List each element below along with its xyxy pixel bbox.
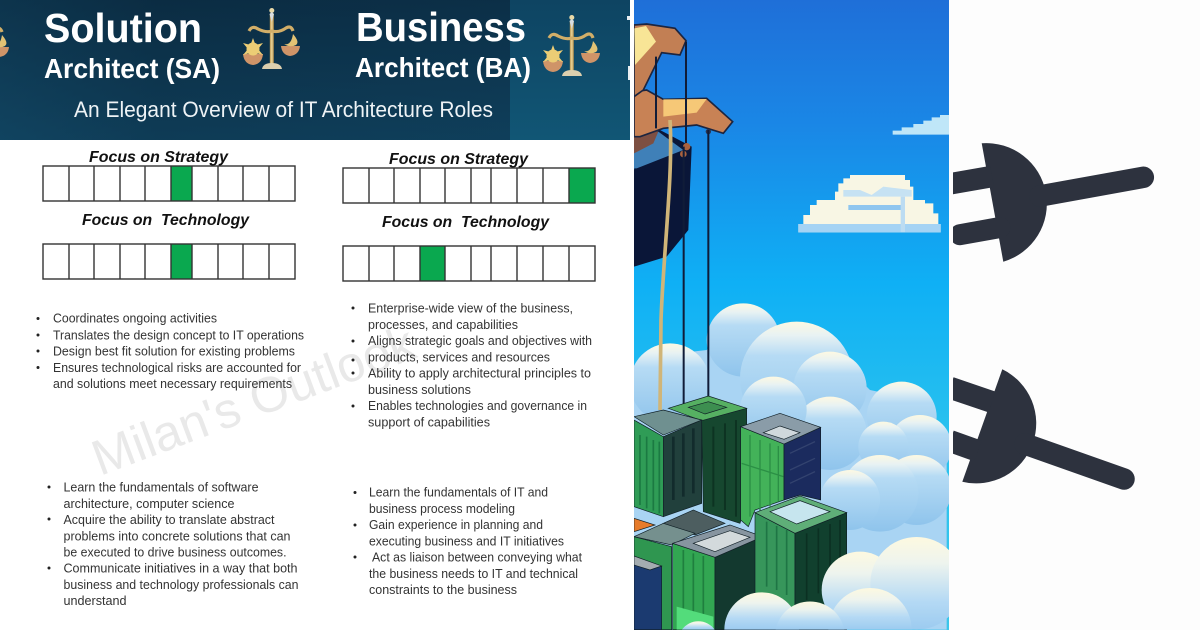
text block: solution architect how to become: understand [64,594,126,608]
icon: lower plug [950,369,1124,483]
text block: solution architect responsibilities: Coordinates ongoing activities [53,312,217,326]
text block: business architect how to become: the business needs to IT and technical [369,567,578,581]
cropped title letters at right edge [627,16,630,80]
meter: strategy [343,168,595,203]
watermark: Milan's Outlook [84,314,423,486]
text block: business architect how to become: executing business and IT initiatives [369,534,564,548]
label: focus on technology: Focus on Technology [382,214,550,231]
text block: business architect responsibilities: products, services and resources [368,350,550,364]
orange accent [634,518,655,532]
text block: business architect responsibilities: support of capabilities [368,416,490,430]
text block: business architect how to become: business process modeling [369,502,515,516]
text block: business architect responsibilities: Aligns strategic goals and objectives with [368,334,592,348]
subtitle: An Elegant Overview of IT Architecture Roles [74,97,493,122]
text block: business architect how to become: Gain experience in planning and [369,518,543,532]
panel: plug icons [949,0,1200,630]
solution architect focus meters [43,149,295,279]
title: Solution Architect [44,12,219,84]
tower: front right [755,496,847,630]
text block: solution architect responsibilities [36,312,304,391]
text block: business architect how to become: Learn the fundamentals of IT and [369,486,548,500]
tower: navy bottom left [634,556,662,630]
text block: solution architect how to become: problems into concrete solutions that can [64,530,290,544]
text block: solution architect how to become: be executed to drive business outcomes. [64,546,286,560]
title: Solution Architect: Architect (SA) [44,53,220,84]
title: Business Architect [356,12,530,83]
text block: solution architect responsibilities: Design best fit solution for existing problems [53,344,295,358]
text block: business architect how to become: constraints to the business [369,583,517,597]
text block: business architect responsibilities: Enables technologies and governance in [368,399,587,413]
text block: business architect how to become: Act as liaison between conveying what [372,550,582,564]
business architect focus meters [343,151,595,281]
illustration: balloon crane with ropes [634,24,733,267]
illustration: small and pixel clouds [798,115,950,232]
title: Business Architect: Business [356,4,526,50]
text block: business architect responsibilities: Enterprise-wide view of the business, [368,302,573,316]
panel: sky illustration [630,0,963,630]
text block: solution architect how to become [48,480,298,608]
text block: business architect responsibilities [352,302,592,430]
title: Solution Architect: Solution [44,5,202,51]
label: focus on strategy: Focus on Strategy [389,151,529,168]
text block: solution architect how to become: Learn the fundamentals of software [64,480,258,494]
icon: scales of solution architect [243,8,300,69]
illustration: cloud bank [630,303,952,630]
label: focus on technology: Focus on Technology [82,212,250,229]
text block: solution architect responsibilities: Translates the design concept to IT operations [53,328,304,342]
tower: left tall [634,410,702,517]
tower: front left [634,523,695,630]
meter: technology [43,244,295,279]
label: focus on strategy: Focus on Strategy [89,149,229,166]
tower: navy server [741,413,821,527]
text block: solution architect how to become: business and technology professionals can [64,578,298,592]
text block: solution architect responsibilities: Ensures technological risks are accounted for [53,361,301,375]
tower: dark block [663,510,725,535]
icon: cropped scales at left edge [0,27,9,57]
meter: technology [343,246,595,281]
icon: upper plug [950,143,1143,262]
text block: business architect responsibilities: processes, and capabilities [368,318,518,332]
text block: solution architect how to become: Acquire the ability to translate abstract [64,513,275,527]
meter: strategy [43,166,295,201]
text block: solution architect how to become: architecture, computer science [64,497,234,511]
text block: business architect how to become [354,486,582,597]
illustration: server tower buildings [634,396,847,630]
text block: solution architect how to become: Communicate initiatives in a way that both [64,562,298,576]
tower: front centre [673,525,763,630]
text block: business architect responsibilities: business solutions [368,383,471,397]
illustration: crane ropes [660,120,708,410]
icon: scales of business architect [543,15,600,76]
text block: solution architect responsibilities: and solutions meet necessary requirements [53,377,292,391]
text block: business architect responsibilities: Ability to apply architectural principles to [368,366,591,380]
tower: back centre [668,396,747,523]
illustration: foreground clouds [682,537,963,630]
title: Business Architect: Architect (BA) [355,52,531,83]
header banner [0,0,630,140]
